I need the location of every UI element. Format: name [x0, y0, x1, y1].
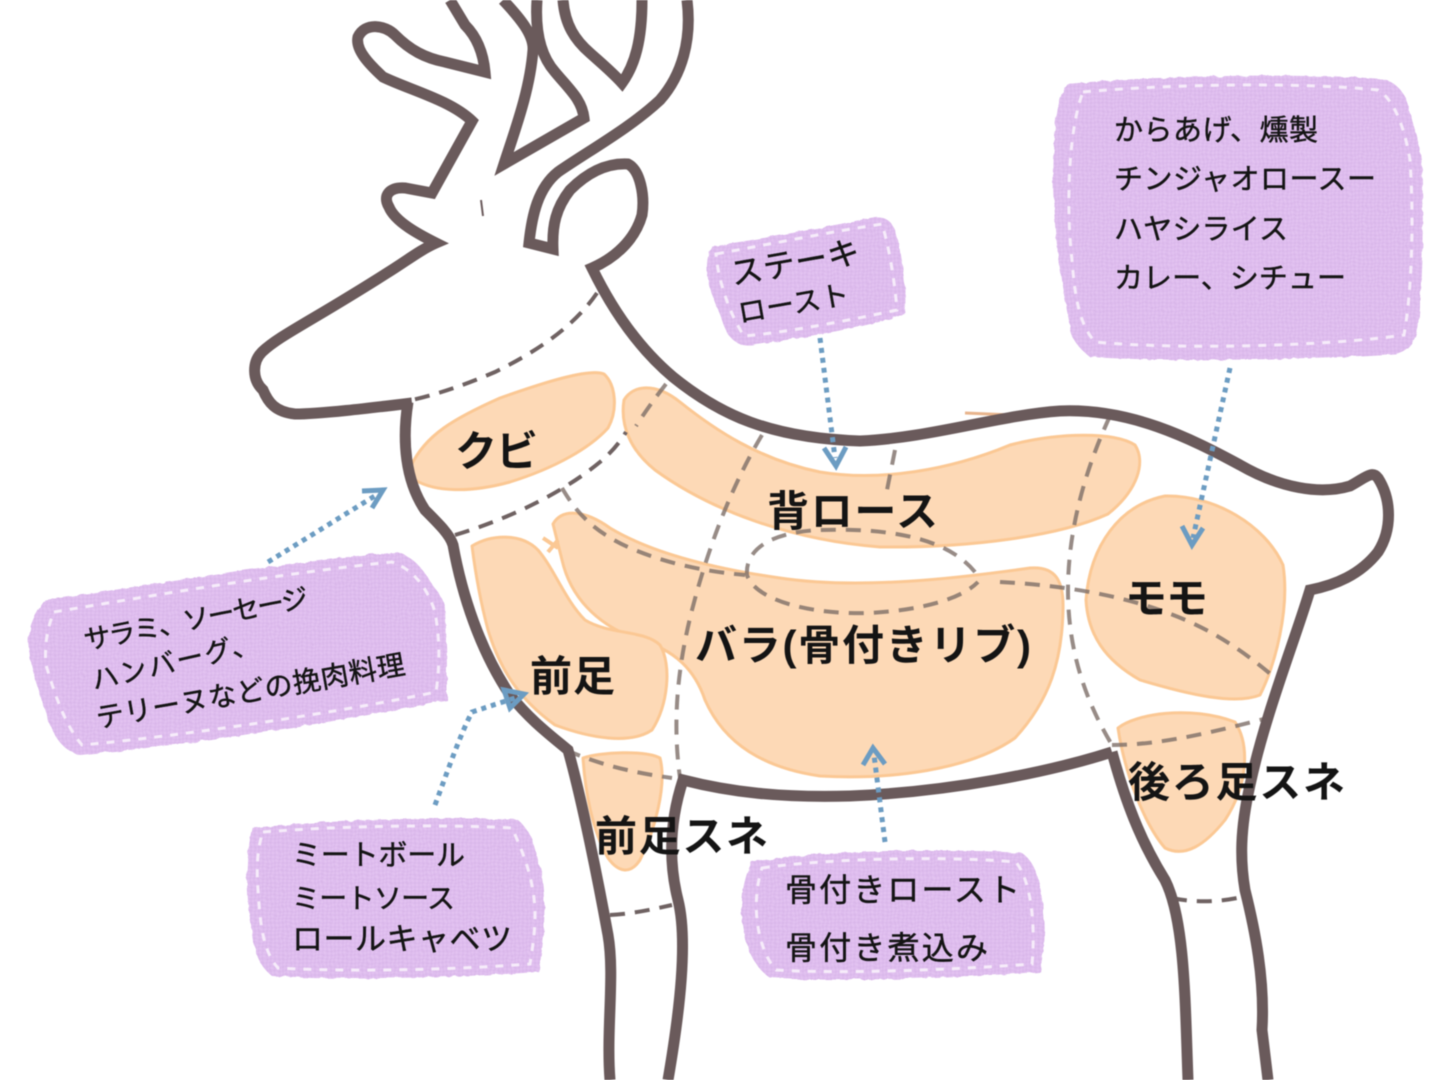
callout: stews and smoked dishes: チンジャオロースー: [1114, 164, 1376, 196]
inner hind leg: [1112, 752, 1188, 1080]
arrow: meatball callout to foreleg: [435, 690, 524, 805]
callout: mince dishes: [28, 552, 447, 755]
callout: bone-in dishes: 骨付きロースト: [785, 872, 1020, 908]
head and front of neck, foreleg: [255, 0, 485, 414]
callout: steak and roast: ロースト: [736, 279, 851, 329]
callout: stews and smoked dishes: ハヤシライス: [1114, 214, 1288, 246]
arrow: steak callout to loin: [820, 338, 846, 466]
deer outline: [255, 0, 1389, 1080]
callout: meatball dishes: [247, 818, 544, 978]
cut label: fore shin: 前足スネ: [595, 813, 768, 860]
cut: hind shin: [1118, 713, 1245, 851]
callout: bone-in dishes: [742, 850, 1044, 980]
callout: mince dishes: サラミ、ソーセージ: [81, 583, 311, 656]
cut label: ribs: バラ(骨付きリブ): [695, 622, 1031, 669]
belly and inner foreleg: [668, 752, 1112, 1080]
arrow: bone-in callout to ribs: [863, 748, 885, 842]
cut: thigh: [1086, 496, 1285, 699]
cut: ribs: [553, 513, 1063, 777]
stray orange stroke on back: [965, 413, 1012, 415]
cut: rib notch: [543, 538, 558, 552]
cut label: foreleg: 前足: [530, 653, 615, 700]
antler main and ear: [529, 0, 1388, 1080]
callout: stews and smoked dishes: [1053, 76, 1423, 360]
head mark: [481, 200, 483, 216]
callout: mince dishes: テリーヌなどの挽肉料理: [94, 649, 407, 734]
cut label: hind shin: 後ろ足スネ: [1128, 759, 1345, 806]
callout: meatball dishes: ミートソース: [292, 883, 455, 914]
cut label: loin: 背ロース: [767, 488, 938, 535]
cut regions: [411, 373, 1285, 870]
callout: steak and roast: ステーキ: [728, 234, 862, 292]
callout: steak and roast: [707, 217, 905, 345]
arrow: stew callout to thigh: [1182, 368, 1230, 545]
cut label: neck: クビ: [455, 428, 538, 475]
dashed butchery lines: [412, 293, 1280, 915]
antler second branch: [503, 0, 584, 164]
front of neck to foreleg: [405, 402, 611, 1080]
cut: foreleg: [472, 537, 667, 738]
callout: meatball dishes: ロールキャベツ: [292, 922, 512, 957]
arrow: mince callout to neck: [268, 490, 383, 562]
cut label: thigh: モモ: [1125, 575, 1208, 622]
callout: meatball dishes: ミートボール: [292, 840, 465, 872]
callout: stews and smoked dishes: からあげ、燻製: [1114, 114, 1318, 147]
callout: stews and smoked dishes: カレー、シチュー: [1114, 263, 1346, 295]
cut: neck: [411, 373, 614, 490]
callout: bone-in dishes: 骨付き煮込み: [785, 930, 988, 966]
antler third branch: [563, 0, 642, 83]
cut: loin: [623, 388, 1140, 547]
cut: fore shin: [583, 753, 662, 870]
callout: mince dishes: ハンバーグ、: [89, 628, 261, 696]
